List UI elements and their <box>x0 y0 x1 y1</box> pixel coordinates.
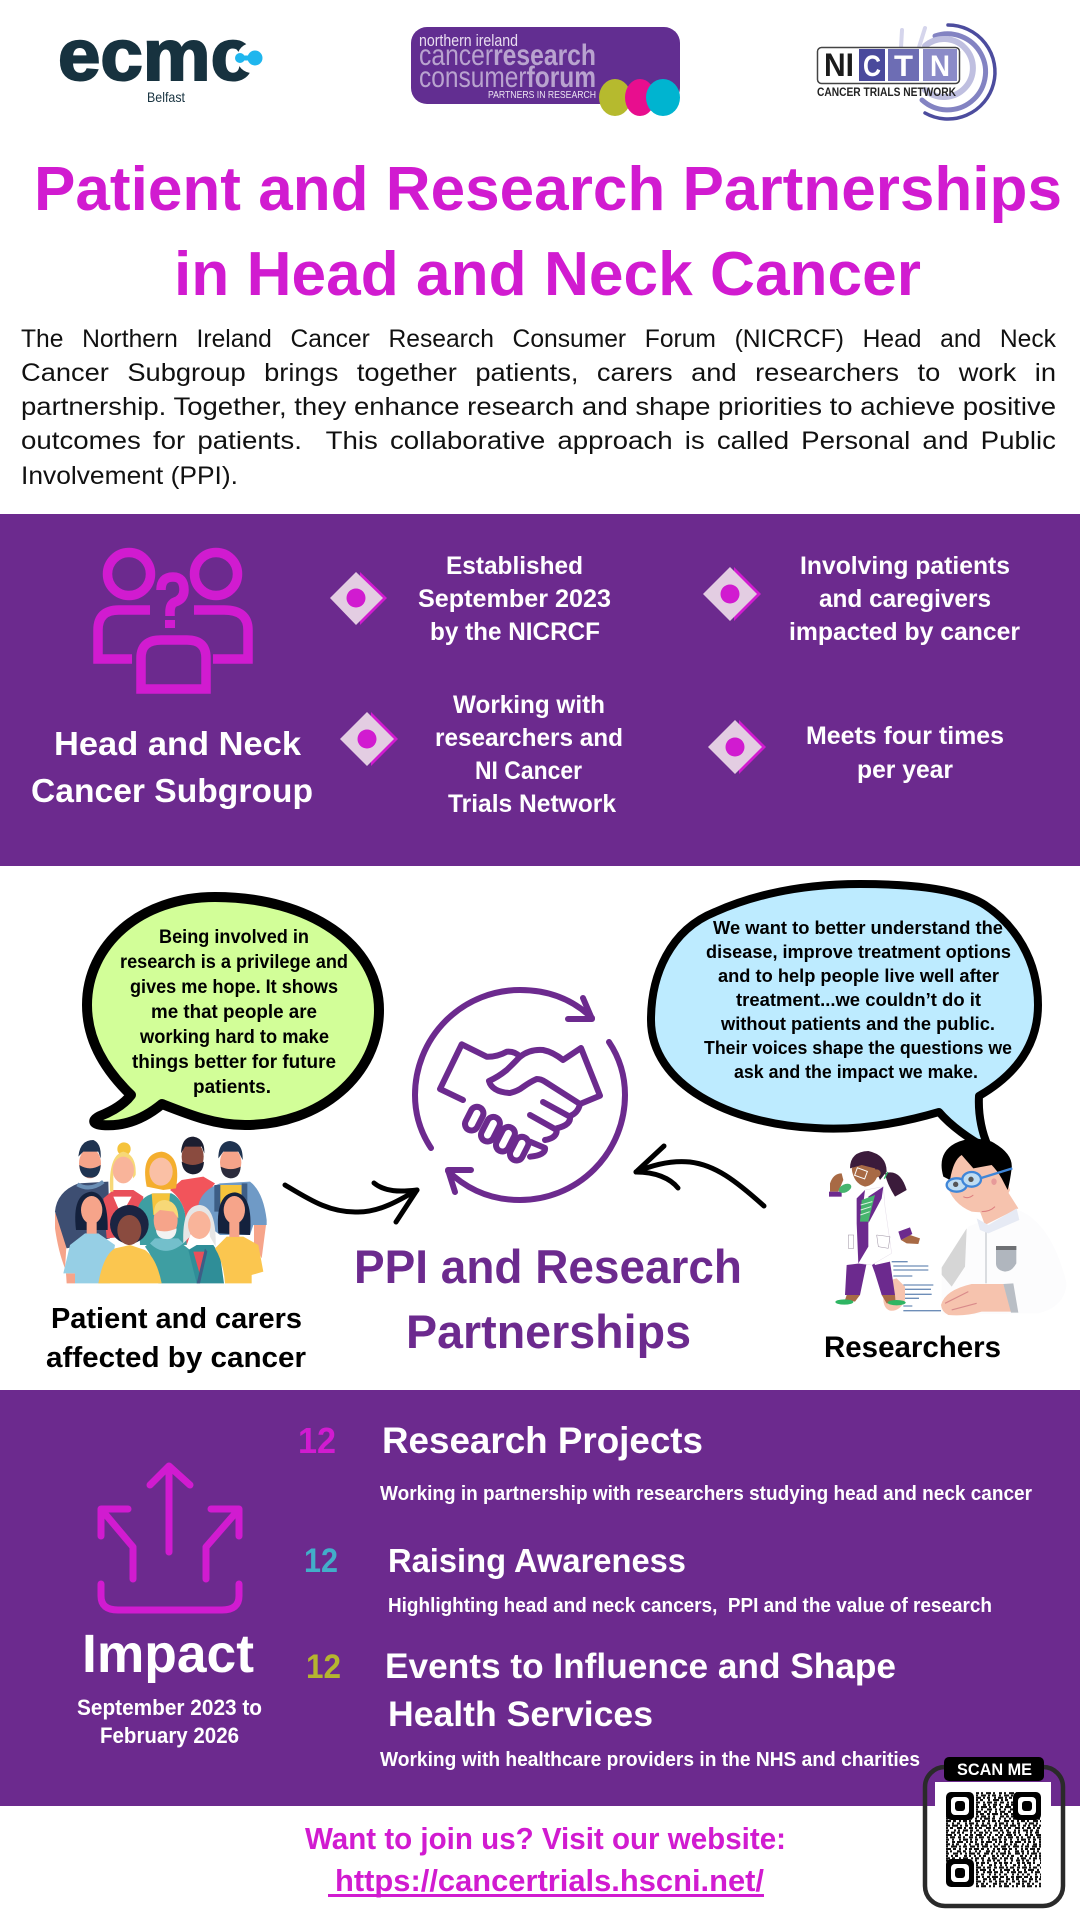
fact: working with researchers: NI Cancer <box>475 757 582 785</box>
fact: involving patients <box>789 552 1020 646</box>
speech bubble: patient quote: patients. <box>193 1076 271 1098</box>
heading: PPI and Research Partnerships <box>354 1240 742 1358</box>
stat: events: Working with healthcare providers in the NHS and charities <box>380 1749 920 1771</box>
intro text block <box>21 325 1056 490</box>
speech bubble: patient quote: me that people are <box>151 1001 317 1023</box>
fact: involving patients: and caregivers <box>819 585 991 613</box>
stat: raising awareness: Raising Awareness <box>388 1542 686 1579</box>
icon: handshake in circular arrows <box>415 990 625 1200</box>
intro text block: Involvement (PPI). <box>21 462 238 490</box>
intro text block: The Northern Ireland Cancer Research Consumer Forum (NICRCF) Head and Neck <box>21 325 1056 353</box>
illustration: researchers <box>829 1139 1067 1315</box>
title: Patient and Research Partnerships <box>34 155 1062 224</box>
speech bubble: researcher quote: We want to better understand the <box>713 917 1003 938</box>
fact: working with researchers: Working with <box>453 691 605 719</box>
illustration: group of patients and carers <box>55 1137 267 1283</box>
caption: patient and carers: Patient and carers <box>51 1303 302 1335</box>
speech bubble: patient quote <box>87 897 379 1125</box>
QR code: scan me <box>925 1757 1063 1906</box>
fact: established: Established <box>446 552 583 580</box>
bullet diamond 4 <box>708 720 766 774</box>
arrow: researchers to partnership <box>636 1146 764 1206</box>
panel: impact <box>0 1390 1080 1806</box>
fact: involving patients: Involving patients <box>800 552 1010 580</box>
fact: established: by the NICRCF <box>430 618 600 646</box>
logo: NI Cancer Trials Network: N <box>930 50 950 83</box>
logo: Northern Ireland Cancer Research Consumer Forum <box>411 27 680 116</box>
panel: Head and Neck Cancer Subgroup <box>0 514 1080 866</box>
fact: established <box>418 552 611 646</box>
stat: events <box>306 1647 920 1771</box>
call to action: website: https://cancertrials.hscni.net/ <box>335 1863 764 1898</box>
logo: NI Cancer Trials Network: T <box>894 50 913 83</box>
heading: PPI and Research Partnerships: PPI and Research <box>354 1240 742 1293</box>
intro text block: partnership. Together, they enhance research and shape priorities to achieve positive <box>21 393 1056 421</box>
subgroup heading: Cancer Subgroup <box>31 772 313 809</box>
fact: involving patients: impacted by cancer <box>789 618 1020 646</box>
caption: patient and carers: affected by cancer <box>46 1342 306 1374</box>
impact dates: February 2026 <box>100 1723 239 1748</box>
caption: researchers: Researchers <box>824 1331 1001 1364</box>
speech bubble: researcher quote: and to help people live well after <box>718 965 999 986</box>
stat: events: 12 <box>306 1648 341 1686</box>
fact: meets four times: per year <box>857 756 953 784</box>
speech bubble: researcher quote: treatment...we couldn’t do it <box>736 989 981 1010</box>
speech bubble: researcher quote: without patients and the public. <box>720 1013 995 1034</box>
speech bubble: patient quote: research is a privilege and <box>120 951 348 973</box>
logo: Northern Ireland Cancer Research Consumer Forum: PARTNERS IN RESEARCH <box>488 90 596 101</box>
title <box>34 155 1062 309</box>
fact: meets four times: Meets four times <box>806 722 1004 750</box>
logo: ECMC Belfast: ecmc <box>58 16 253 96</box>
impact heading: Impact <box>82 1624 254 1684</box>
logo: Northern Ireland Cancer Research Consumer Forum: consumerforum <box>419 61 596 94</box>
logo: Northern Ireland Cancer Research Consumer Forum: northern ireland <box>419 31 518 50</box>
arrow: patients to partnership <box>285 1183 417 1222</box>
speech bubble: researcher quote <box>651 884 1038 1150</box>
QR code: scan me: SCAN ME <box>957 1760 1032 1779</box>
stat: research projects <box>298 1420 1032 1505</box>
logo: ECMC Belfast: Belfast <box>147 89 185 105</box>
title: in Head and Neck Cancer <box>174 240 921 309</box>
intro text block: outcomes for patients. This collaborative approach is called Personal and Public <box>21 427 1056 455</box>
subgroup heading: Head and Neck <box>54 725 302 762</box>
caption: patient and carers <box>46 1303 306 1374</box>
logo: NI Cancer Trials Network: C <box>863 50 881 83</box>
stat: events: Events to Influence and Shape <box>385 1647 896 1686</box>
heading: PPI and Research Partnerships: Partnerships <box>406 1305 691 1358</box>
fact: established: September 2023 <box>418 585 611 613</box>
stat: research projects: Research Projects <box>382 1420 703 1461</box>
stat: events: Health Services <box>388 1695 653 1734</box>
speech bubble: patient quote: gives me hope. It shows <box>130 976 338 998</box>
call to action: website: Want to join us? Visit our website: <box>305 1821 786 1856</box>
call to action: website <box>305 1821 786 1898</box>
stat: raising awareness: Highlighting head and neck cancers, PPI and the value of research <box>388 1595 992 1617</box>
stat: raising awareness: 12 <box>304 1542 338 1580</box>
stat: raising awareness <box>304 1542 992 1617</box>
icon: upward arrows <box>101 1466 239 1610</box>
speech bubble: patient quote: working hard to make <box>139 1026 329 1048</box>
fact: working with researchers: researchers and <box>435 724 623 752</box>
impact dates <box>77 1695 262 1748</box>
bullet diamond 2 <box>703 567 761 621</box>
fact: working with researchers: Trials Network <box>448 790 616 818</box>
fact: working with researchers <box>435 691 623 818</box>
stat: research projects: Working in partnership with researchers studying head and neck cancer <box>380 1483 1032 1505</box>
speech bubble: researcher quote: ask and the impact we make. <box>734 1061 978 1082</box>
logo: NI Cancer Trials Network: CANCER TRIALS NETWORK <box>817 85 956 99</box>
speech bubble: researcher quote: disease, improve treatment options <box>706 941 1011 962</box>
speech bubble: patient quote: Being involved in <box>159 926 309 948</box>
speech bubble: researcher quote: Their voices shape the questions we <box>704 1037 1012 1058</box>
subgroup heading <box>31 725 313 809</box>
logo: NI Cancer Trials Network <box>817 25 995 119</box>
intro text block: Cancer Subgroup brings together patients, carers and researchers to work in <box>21 359 1056 387</box>
logo: NI Cancer Trials Network: NI <box>824 47 854 83</box>
stat: research projects: 12 <box>298 1420 336 1461</box>
fact: meets four times <box>806 722 1004 784</box>
logo: Northern Ireland Cancer Research Consumer Forum: cancerresearch <box>419 39 596 72</box>
bullet diamond 1 <box>330 572 387 625</box>
icon: people with question mark <box>98 552 248 689</box>
speech bubble: patient quote: things better for future <box>132 1051 336 1073</box>
impact dates: September 2023 to <box>77 1695 262 1720</box>
bullet diamond 3 <box>340 712 398 766</box>
